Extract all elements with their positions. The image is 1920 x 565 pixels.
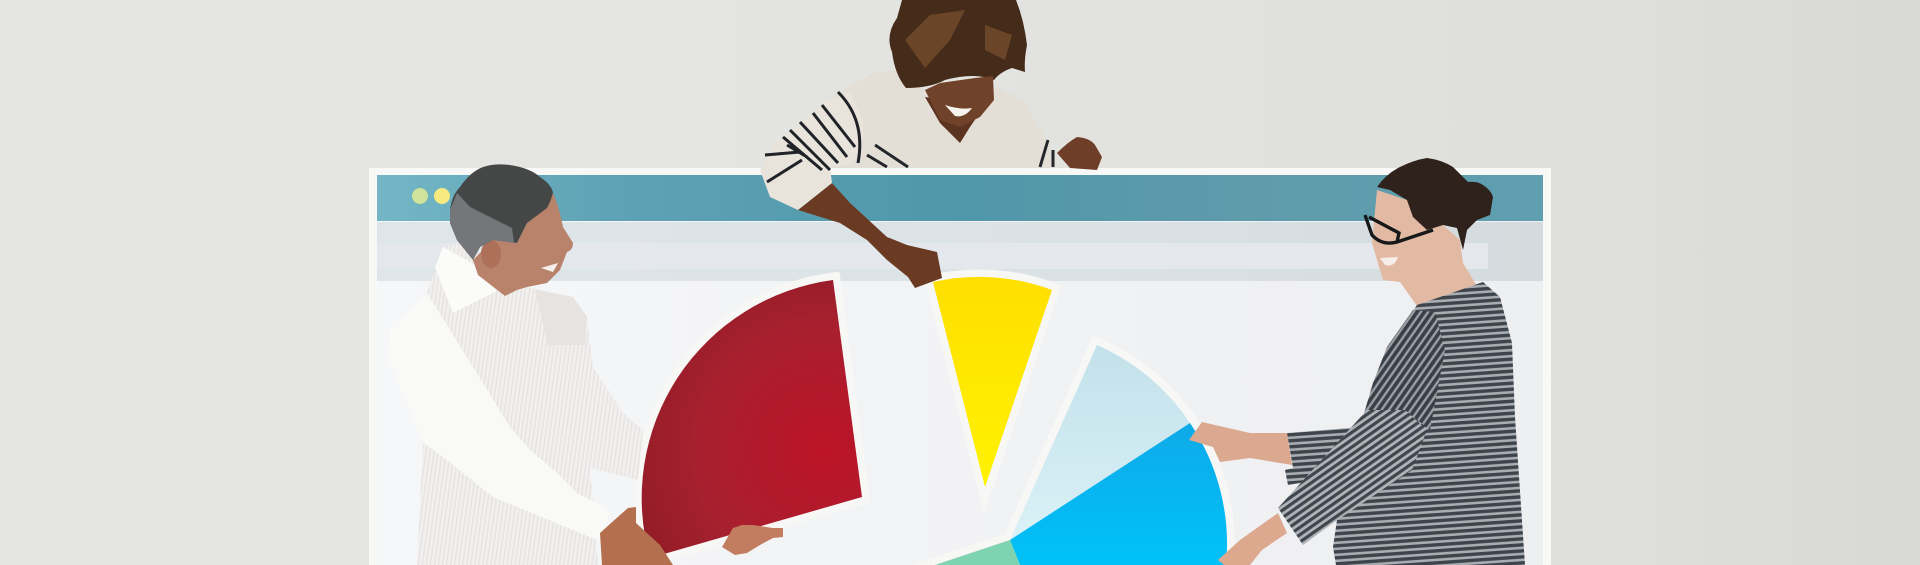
pie slice: yellow [933, 277, 1052, 487]
shirt chest shading [535, 290, 587, 345]
hair highlights [905, 10, 1012, 68]
slice: bright blue [1010, 423, 1227, 565]
front forearm sleeve [1278, 410, 1427, 545]
person: woman at top, head, sleeve and arms over board [760, 0, 1102, 288]
trousers [1378, 558, 1413, 565]
striped sleeve [760, 92, 863, 210]
forearm [798, 183, 942, 288]
upper hand [1189, 422, 1292, 465]
right hand fingers [722, 525, 783, 555]
lower hand [1218, 513, 1287, 565]
grey temple hair [450, 193, 514, 260]
slice: green [935, 540, 1020, 565]
window dots [412, 188, 450, 204]
pie: blue and green slices [860, 345, 1227, 565]
sleeve [387, 293, 610, 542]
pie slice: red [642, 280, 862, 558]
browser title bar [377, 175, 1543, 221]
sweater body [1333, 282, 1525, 565]
smile [1380, 257, 1398, 266]
hair [450, 164, 553, 260]
person: man on left [387, 164, 783, 565]
person: woman on right [1189, 158, 1525, 565]
presentation board [369, 168, 1551, 565]
smile [945, 105, 972, 116]
shirt body [387, 243, 643, 565]
ear [481, 240, 501, 268]
face [925, 76, 994, 127]
back sleeve and cuff [1285, 427, 1360, 485]
neck and face [1372, 190, 1477, 306]
upper sleeve [1360, 310, 1445, 430]
person: woman at top, torso behind board [760, 70, 1058, 170]
browser toolbar bands [377, 222, 1543, 281]
hair [1377, 158, 1493, 250]
right fist [1057, 137, 1102, 170]
glasses [1365, 215, 1433, 243]
face and neck [473, 193, 573, 296]
left hand [600, 507, 673, 565]
sleeve stripes [765, 92, 860, 182]
hair [889, 0, 1027, 88]
mouth [541, 263, 558, 272]
slice: pale blue [1010, 345, 1190, 540]
collar [435, 247, 505, 313]
